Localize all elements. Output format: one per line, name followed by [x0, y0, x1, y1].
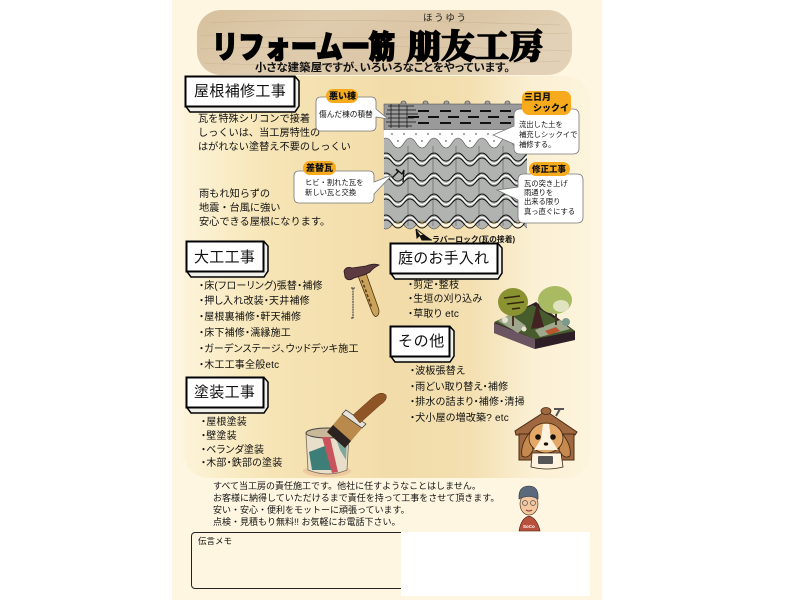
- icon: craftsman portrait: [518, 486, 540, 532]
- list: carpentry: ・ガーデンステージ、ウッドデッキ施工: [199, 344, 359, 355]
- list: carpentry: ・屋根裏補修・軒天補修: [199, 312, 301, 323]
- heading: other: [390, 326, 455, 363]
- list: painting: ・屋根塗装: [201, 417, 247, 428]
- callout: replace tile: 差替瓦: [306, 162, 333, 172]
- text: roof repair description: 瓦を特殊シリコンで接着: [198, 114, 310, 125]
- main title name: 朋友工房: [407, 28, 543, 66]
- list: garden care: ・生垣の刈り込み: [408, 294, 482, 305]
- text: roof repair description: はがれない塗替え不要のしっくい: [198, 142, 351, 153]
- callout: correction work: 瓦の突き上げ: [524, 179, 568, 188]
- heading: carpentry: [186, 240, 269, 278]
- heading: painting: [186, 376, 269, 414]
- callout: bad ridge: 傷んだ棟の積替: [319, 110, 373, 119]
- label: rubber lock: ラバーロック(瓦の接着): [432, 235, 515, 244]
- callout: mikazuki shikkui: 流出した土を: [519, 120, 563, 129]
- callout: mikazuki shikkui: 三日月: [524, 92, 551, 102]
- memo box: 伝言メモ: [198, 536, 232, 546]
- list: other: ・波板張替え: [410, 366, 465, 377]
- list: other: ・排水の詰まり・補修・清掃: [410, 397, 525, 408]
- callout: bad ridge: [316, 89, 389, 132]
- arrow to rubber lock: [416, 229, 432, 240]
- callout: correction work: 修正工事: [532, 164, 566, 174]
- list: carpentry: ・木工工事全般etc: [199, 360, 279, 371]
- callout: correction work: [496, 162, 584, 224]
- list: garden care: [408, 279, 482, 320]
- callout: mikazuki shikkui: シックイ: [533, 103, 569, 113]
- list: other: ・雨どい取り替え・補修: [410, 382, 508, 393]
- text: roof promise: 安心できる屋根になります。: [199, 217, 330, 228]
- heading: carpentry: 大工工事: [194, 249, 255, 266]
- heading: painting: 塗装工事: [194, 384, 255, 401]
- text: company message: 点検・見積もり無料!! お気軽にお電話下さい。: [213, 517, 401, 527]
- heading: roof repair: [184, 76, 300, 113]
- text: company message: 安い・安心・便利をモットーに頑張っています。: [213, 505, 410, 515]
- list: painting: [201, 416, 282, 469]
- heading: garden care: 庭のお手入れ: [398, 250, 489, 267]
- list: carpentry: ・床下補修・濡縁施工: [199, 328, 291, 339]
- content panel with gradient: [184, 76, 590, 478]
- icon: dog in dog house: [514, 407, 578, 470]
- list: carpentry: ・押し入れ改装・天井補修: [199, 296, 310, 307]
- heading: garden care: [390, 242, 503, 280]
- white blank area: [401, 532, 590, 596]
- text: company message: お客様に納得していただけるまで責任を持って工事をさせて頂きます。: [213, 493, 499, 503]
- list: painting: ・壁塗装: [201, 431, 237, 442]
- text: roof promise: 地震・台風に強い: [199, 203, 280, 214]
- list: garden care: ・剪定・整枝: [408, 280, 459, 291]
- poster background: [172, 0, 602, 600]
- list: carpentry: [199, 280, 359, 371]
- callout: correction work: 出来る限り: [524, 197, 560, 206]
- callout: replace tile: ヒビ・割れた瓦を: [305, 178, 363, 187]
- callout: bad ridge: 悪い棟: [329, 90, 356, 100]
- list: painting: ・木部・鉄部の塗装: [201, 458, 282, 469]
- icon: hammer and nail: [344, 264, 380, 318]
- icon: craftsman portrait: SoCo: [523, 524, 535, 529]
- callout: mikazuki shikkui: [492, 91, 580, 154]
- list: other: [410, 365, 525, 424]
- icon: paint can and brush: [303, 393, 387, 477]
- callout: correction work: 真っ直ぐにする: [524, 207, 575, 216]
- callout: mikazuki shikkui: 補充しシックイで: [519, 130, 577, 139]
- list: painting: ・ベランダ塗装: [201, 445, 264, 456]
- heading: other: その他: [398, 333, 445, 350]
- text: roof promise: 雨もれ知らずの: [199, 189, 270, 200]
- memo box: [191, 532, 433, 589]
- roof diagram: [384, 100, 527, 240]
- ruby reading: ほうゆう: [423, 13, 466, 24]
- text: company message: [213, 481, 499, 527]
- text: roof promise: [199, 188, 330, 228]
- crack: [392, 169, 404, 182]
- header: wood sign with title: [197, 10, 572, 75]
- ridge ribs: [401, 101, 510, 107]
- tagline: 小さな建築屋ですが、いろいろなことをやっています。: [255, 60, 510, 74]
- icon: miniature garden: [494, 286, 575, 349]
- list: garden care: ・草取り etc: [408, 309, 459, 320]
- callout: correction work: 雨通りを: [524, 188, 553, 197]
- callout: replace tile: [294, 161, 392, 204]
- tile rows: [380, 153, 536, 228]
- main title: リフォーム一筋: [212, 30, 395, 65]
- text: roof repair description: しっくいは、当工房特性の: [198, 128, 320, 139]
- list: other: ・犬小屋の増改築? etc: [410, 413, 509, 424]
- text: company message: すべて当工房の責任施工です。他社に任すようなことはしません。: [213, 481, 481, 491]
- callout: replace tile: 新しい瓦と交換: [305, 188, 356, 197]
- text: roof repair description: [198, 113, 351, 153]
- callout: mikazuki shikkui: 補修する。: [519, 140, 555, 149]
- heading: roof repair: 屋根補修工事: [194, 83, 286, 100]
- list: carpentry: ・床(フローリング)張替・補修: [199, 281, 323, 292]
